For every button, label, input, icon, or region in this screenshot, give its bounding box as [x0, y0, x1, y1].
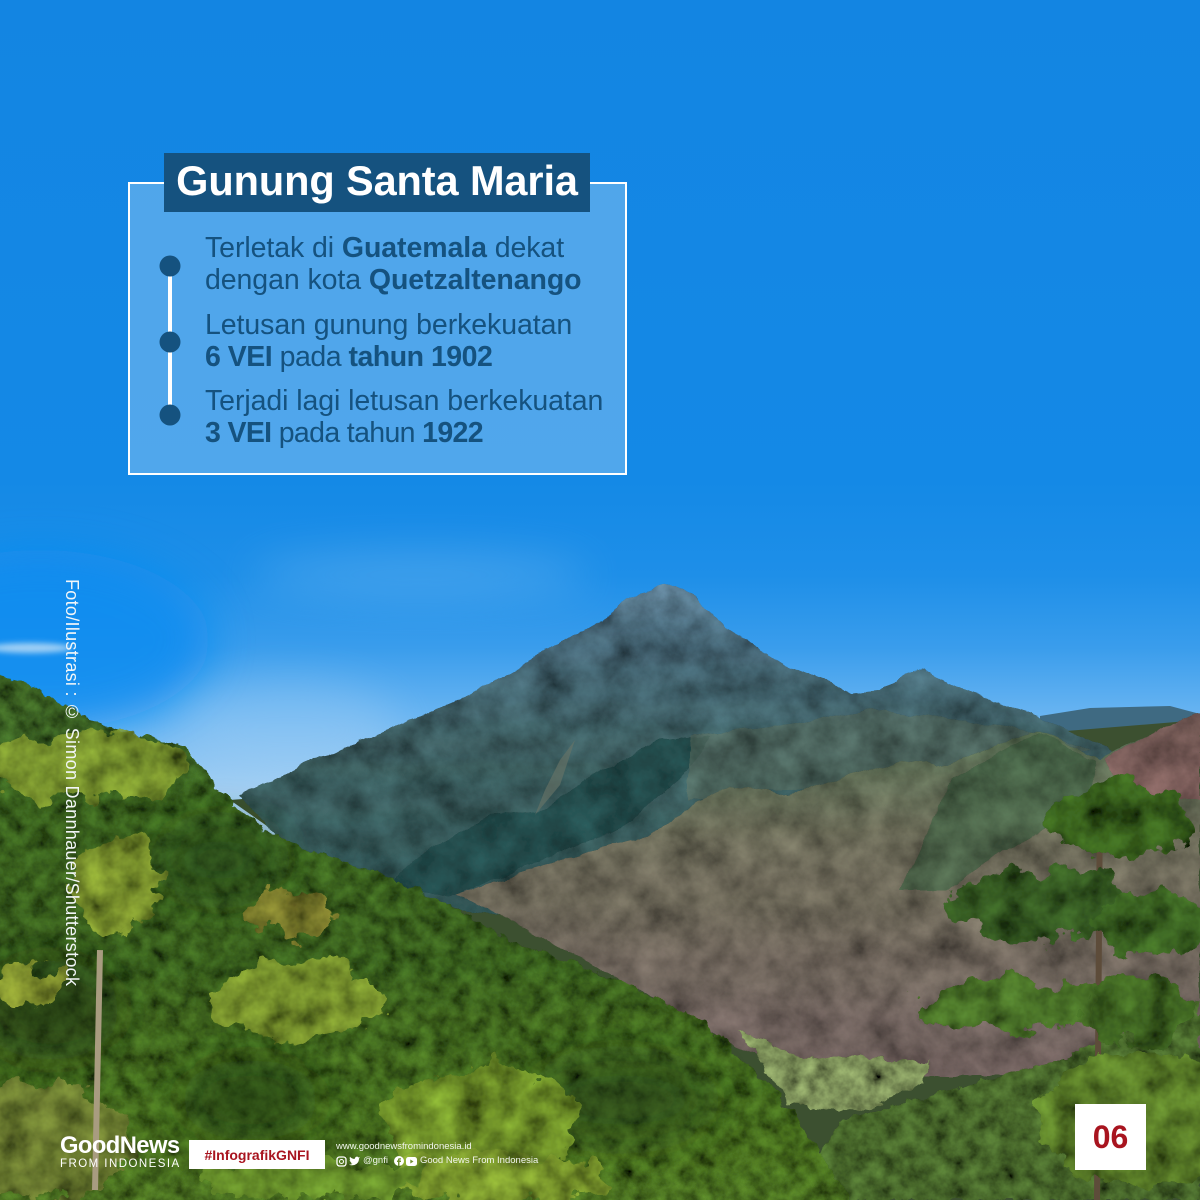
forested hillside left	[0, 665, 860, 1200]
lower right forest	[800, 1000, 1200, 1200]
front brown ridge	[455, 712, 1200, 1080]
eroded brown slope	[690, 710, 1090, 800]
text: 1922 eruption	[205, 385, 603, 449]
title: Gunung Santa Maria	[176, 157, 578, 204]
text: 1902 eruption	[205, 309, 572, 373]
volcano Santa Maria	[238, 585, 1120, 950]
dark forest flank	[385, 735, 712, 895]
ash scar	[535, 740, 575, 815]
icon: facebook	[394, 1156, 404, 1166]
dark forest shadows	[0, 825, 710, 1140]
text: location: dengan kota Quetzaltenango	[205, 264, 582, 296]
pine tree right	[915, 784, 1200, 1200]
icon: twitter	[349, 1156, 360, 1166]
red-brown slope right	[1105, 712, 1200, 800]
text: 1902 eruption: 6 VEI pada tahun 1902	[205, 341, 492, 373]
website and social links	[336, 1141, 538, 1167]
text: 1922 eruption: Terjadi lagi letusan berkekuatan	[205, 385, 603, 417]
photo credit: Foto/Ilustrasi : © Simon Dannhauer/Shutterstock	[62, 579, 82, 986]
icon: youtube	[406, 1157, 417, 1166]
website and social links: Good News From Indonesia	[420, 1155, 538, 1166]
logo: GoodNews From Indonesia: FROM INDONESIA	[60, 1158, 181, 1170]
valley fields	[740, 1030, 930, 1110]
pine foreground centre	[200, 1065, 610, 1200]
text: location: Terletak di Guatemala dekat	[205, 232, 564, 264]
text: 1922 eruption: 3 VEI pada tahun 1922	[205, 417, 483, 449]
bright foreground tree canopy left	[0, 731, 390, 1200]
page number: 06	[1093, 1119, 1128, 1155]
distant ridge	[1040, 706, 1200, 790]
text: location	[205, 232, 582, 296]
info panel	[128, 182, 627, 475]
hashtag badge	[189, 1140, 325, 1169]
green ridge patch	[900, 732, 1095, 890]
icon: instagram	[336, 1156, 347, 1167]
text: 1902 eruption: Letusan gunung berkekuatan	[205, 309, 572, 341]
timeline connector with three markers	[160, 256, 180, 426]
website and social links: @gnfi	[363, 1155, 388, 1166]
logo: GoodNews From Indonesia: GoodNews	[60, 1132, 179, 1159]
hillside base fill	[230, 720, 1200, 1200]
page number	[1075, 1104, 1146, 1170]
hashtag badge: #InfografikGNFI	[204, 1147, 310, 1163]
tree trunk	[95, 950, 100, 1190]
website and social links: www.goodnewsfromindonesia.id	[336, 1141, 472, 1152]
